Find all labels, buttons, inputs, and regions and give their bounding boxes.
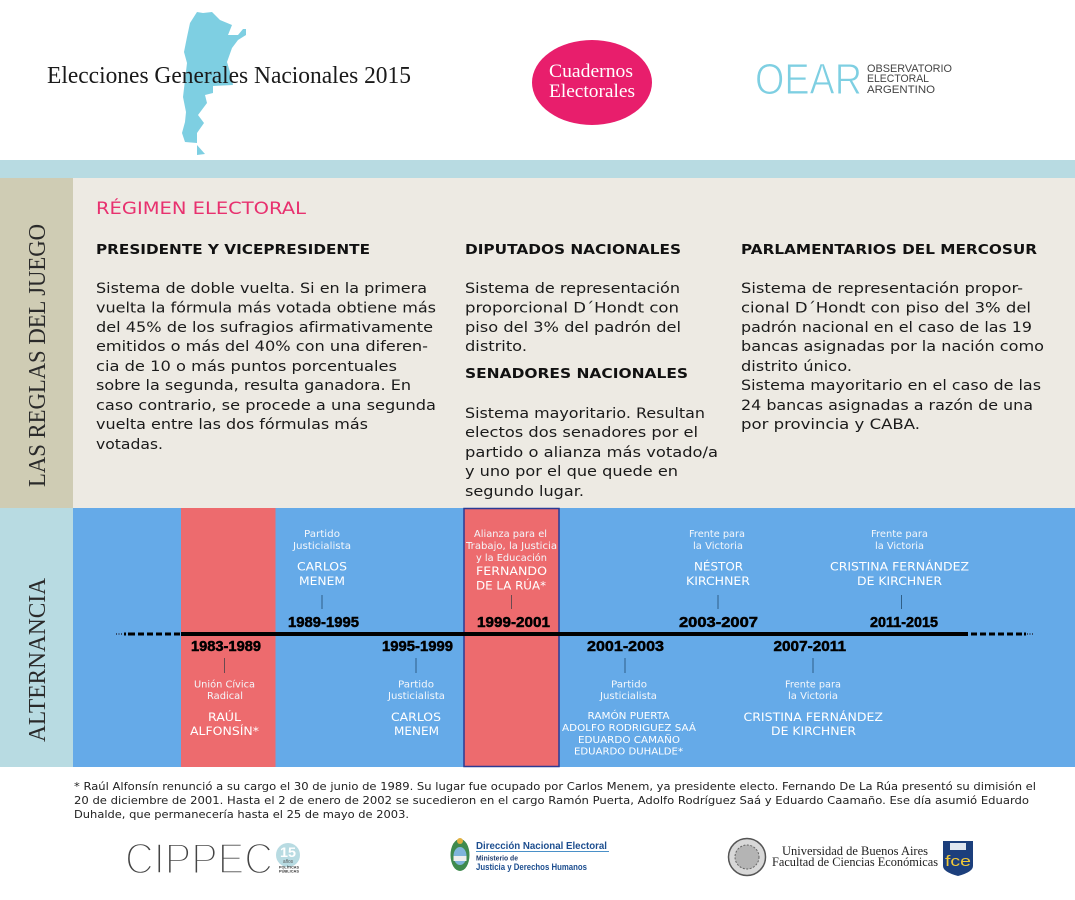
period: interinos 2001-2003: EDUARDO DUHALDE* bbox=[574, 746, 683, 758]
period: Alfonsín 1983-1989: RAÚL bbox=[208, 709, 242, 724]
column: parlamentarios del mercosur: Sistema de representación propor- bbox=[741, 281, 1023, 297]
period: De la Rúa 1999-2001: Alianza para el bbox=[474, 529, 547, 540]
column: parlamentarios del mercosur: padrón nacional en el caso de las 19 bbox=[741, 320, 1032, 336]
footnote: 20 de diciembre de 2001. Hasta el 2 de enero de 2002 se sucedieron en el cargo Ramón Puerta, Adolfo Rodríguez Saá y Eduardo Caamaño. Ese día asumió Eduardo bbox=[74, 795, 1029, 807]
logo: Universidad de Buenos Aires: fce bbox=[945, 853, 971, 870]
period: Menem 1995-1999 bbox=[382, 639, 453, 738]
period: Fernández de Kirchner 2007-2011: DE KIRCHNER bbox=[771, 724, 856, 738]
header bbox=[47, 12, 952, 155]
period: Kirchner 2003-2007: la Victoria bbox=[693, 541, 743, 552]
period: Menem 1989-1995: Partido bbox=[304, 529, 340, 540]
logo: CIPPEC: CIPPEC bbox=[125, 834, 273, 884]
column: diputados nacionales: DIPUTADOS NACIONALES bbox=[465, 242, 681, 258]
badge: Cuadernos Electorales: Cuadernos bbox=[549, 62, 633, 82]
period: De la Rúa 1999-2001: DE LA RÚA* bbox=[476, 578, 546, 592]
period: Menem 1989-1995 bbox=[288, 529, 359, 631]
logo: OEAR: OBSERVATORIO bbox=[867, 63, 952, 75]
column: senadores nacionales bbox=[465, 366, 718, 500]
period: Fernández de Kirchner 2011-2015: la Victoria bbox=[875, 541, 924, 552]
column: parlamentarios del mercosur: bancas asignadas por la nación como bbox=[741, 339, 1044, 355]
logo: Universidad de Buenos Aires: Facultad de Ciencias Económicas bbox=[772, 854, 938, 869]
column: presidente y vicepresidente: PRESIDENTE Y VICEPRESIDENTE bbox=[96, 242, 370, 258]
section label: las reglas del juego: LAS REGLAS DEL JUEGO bbox=[24, 224, 51, 487]
period: interinos 2001-2003 bbox=[562, 639, 696, 758]
icon: map of Argentina bbox=[182, 12, 246, 155]
column: parlamentarios del mercosur: distrito único. bbox=[741, 359, 852, 375]
column: diputados nacionales: piso del 3% del padrón del bbox=[465, 320, 681, 336]
column: parlamentarios del mercosur: PARLAMENTARIOS DEL MERCOSUR bbox=[741, 242, 1038, 258]
period: Fernández de Kirchner 2007-2011: la Victoria bbox=[788, 691, 838, 702]
logo: CIPPEC: años bbox=[283, 859, 293, 865]
period: De la Rúa 1999-2001: FERNANDO bbox=[476, 564, 547, 578]
period: Menem 1995-1999: Justicialista bbox=[387, 691, 445, 702]
column: presidente y vicepresidente: Sistema de doble vuelta. Si en la primera bbox=[96, 281, 427, 297]
period: Fernández de Kirchner 2007-2011: CRISTINA FERNÁNDEZ bbox=[744, 709, 883, 724]
period: Kirchner 2003-2007: 2003-2007 bbox=[679, 615, 758, 631]
period: De la Rúa 1999-2001 bbox=[465, 529, 557, 631]
column: diputados nacionales: distrito. bbox=[465, 339, 527, 355]
period: Alfonsín 1983-1989: ALFONSÍN* bbox=[190, 723, 259, 738]
period: Menem 1995-1999: MENEM bbox=[394, 724, 439, 738]
column: diputados nacionales: proporcional D´Hondt con bbox=[465, 300, 679, 316]
column: parlamentarios del mercosur: cional D´Hondt con piso del 3% del bbox=[741, 300, 1031, 316]
column: senadores nacionales: y uno por el que quede en bbox=[465, 464, 678, 480]
column: presidente y vicepresidente: vuelta entre las dos fórmulas más bbox=[96, 417, 368, 433]
period: De la Rúa 1999-2001: Trabajo, la Justicia bbox=[465, 541, 557, 552]
logo: CIPPEC: PÚBLICAS bbox=[279, 868, 299, 874]
timeline bbox=[115, 632, 1034, 636]
column: parlamentarios del mercosur: Sistema mayoritario en el caso de las bbox=[741, 378, 1041, 394]
period: Menem 1995-1999: Partido bbox=[398, 680, 434, 690]
column: parlamentarios del mercosur: por provincia y CABA. bbox=[741, 417, 920, 433]
period: Kirchner 2003-2007: Frente para bbox=[689, 529, 745, 540]
logo: CIPPEC: POLÍTICAS bbox=[279, 864, 299, 870]
badge: Cuadernos Electorales: Electorales bbox=[549, 82, 635, 102]
logo: Dirección Nacional Electoral: Ministerio de bbox=[476, 854, 518, 862]
section label: alternancia: ALTERNANCIA bbox=[24, 578, 51, 742]
period: Fernández de Kirchner 2011-2015 bbox=[830, 529, 969, 631]
footnote bbox=[74, 781, 1036, 821]
column: senadores nacionales: partido o alianza más votado/a bbox=[465, 445, 718, 461]
period: Menem 1995-1999: CARLOS bbox=[391, 710, 441, 724]
period: Fernández de Kirchner 2007-2011 bbox=[744, 639, 883, 738]
column: parlamentarios del mercosur: 24 bancas asignadas a razón de una bbox=[741, 398, 1033, 414]
logo: OEAR bbox=[755, 55, 952, 104]
period: Kirchner 2003-2007: KIRCHNER bbox=[686, 574, 750, 588]
column: presidente y vicepresidente: votadas. bbox=[96, 437, 163, 453]
red column: 1983-1989 bbox=[181, 508, 276, 767]
panel: alternancia bbox=[0, 508, 1075, 767]
period: Alfonsín 1983-1989 bbox=[190, 639, 261, 738]
period: Fernández de Kirchner 2011-2015: 2011-2015 bbox=[870, 615, 938, 631]
logo: OEAR: ELECTORAL bbox=[867, 73, 929, 85]
period: Fernández de Kirchner 2007-2011: 2007-2011 bbox=[774, 639, 846, 655]
period: Menem 1989-1995: CARLOS bbox=[297, 560, 347, 574]
period: interinos 2001-2003: ADOLFO RODRIGUEZ SAÁ bbox=[562, 721, 696, 734]
column: senadores nacionales: segundo lugar. bbox=[465, 484, 584, 500]
title: Elecciones Generales Nacionales 2015 bbox=[47, 63, 411, 89]
period: Kirchner 2003-2007: NÉSTOR bbox=[694, 558, 743, 574]
column: presidente y vicepresidente: caso contrario, se procede a una segunda bbox=[96, 398, 436, 414]
badge: Cuadernos Electorales bbox=[532, 40, 652, 125]
period: De la Rúa 1999-2001: y la Educación bbox=[476, 552, 547, 564]
red column: 1999-2001 bbox=[464, 508, 559, 766]
period: Kirchner 2003-2007 bbox=[679, 529, 758, 631]
footnote: * Raúl Alfonsín renunció a su cargo el 30 de junio de 1989. Su lugar fue ocupado por Carlos Menem, ya presidente electo. Fernando De La Rúa presentó su dimisión el bbox=[74, 781, 1036, 793]
period: Alfonsín 1983-1989: Radical bbox=[207, 691, 243, 702]
column: senadores nacionales: electos dos senadores por el bbox=[465, 425, 698, 441]
period: Menem 1989-1995: Justicialista bbox=[292, 541, 351, 552]
column: diputados nacionales bbox=[465, 242, 681, 355]
period: interinos 2001-2003: EDUARDO CAMAÑO bbox=[578, 733, 680, 746]
footnote: Duhalde, que permanecería hasta el 25 de mayo de 2003. bbox=[74, 809, 409, 821]
logo: OEAR: OEAR bbox=[755, 55, 862, 104]
logo: Universidad de Buenos Aires bbox=[728, 838, 973, 876]
column: presidente y vicepresidente bbox=[96, 242, 436, 453]
period: interinos 2001-2003: RAMÓN PUERTA bbox=[588, 709, 670, 722]
period: Alfonsín 1983-1989: 1983-1989 bbox=[191, 639, 261, 655]
period: interinos 2001-2003: 2001-2003 bbox=[587, 639, 664, 655]
logo: Dirección Nacional Electoral bbox=[450, 838, 609, 873]
panel: las reglas del juego bbox=[0, 178, 1075, 508]
period: Menem 1995-1999: 1995-1999 bbox=[382, 639, 453, 655]
period: Menem 1989-1995: 1989-1995 bbox=[288, 615, 359, 631]
period: Fernández de Kirchner 2011-2015: Frente para bbox=[871, 529, 928, 540]
period: Menem 1989-1995: MENEM bbox=[299, 574, 345, 588]
period: Fernández de Kirchner 2011-2015: DE KIRCHNER bbox=[857, 574, 942, 588]
column: senadores nacionales: SENADORES NACIONALES bbox=[465, 366, 688, 382]
column: presidente y vicepresidente: sobre la segunda, resulta ganadora. En bbox=[96, 378, 411, 394]
heading: régimen electoral: RÉGIMEN ELECTORAL bbox=[96, 199, 307, 218]
column: senadores nacionales: Sistema mayoritario. Resultan bbox=[465, 406, 705, 422]
column: presidente y vicepresidente: cia de 10 o más puntos porcentuales bbox=[96, 359, 397, 375]
logo: OEAR: ARGENTINO bbox=[867, 84, 935, 96]
period: Alfonsín 1983-1989: Unión Cívica bbox=[194, 678, 255, 690]
period: interinos 2001-2003: Justicialista bbox=[599, 691, 657, 702]
column: presidente y vicepresidente: emitidos o más del 40% con una diferen- bbox=[96, 339, 428, 355]
column: diputados nacionales: Sistema de representación bbox=[465, 281, 680, 297]
period: Fernández de Kirchner 2011-2015: CRISTINA FERNÁNDEZ bbox=[830, 558, 969, 574]
decorative band bbox=[0, 160, 1075, 178]
column: presidente y vicepresidente: vuelta la fórmula más votada obtiene más bbox=[96, 300, 436, 316]
column: presidente y vicepresidente: del 45% de los sufragios afirmativamente bbox=[96, 320, 433, 336]
period: De la Rúa 1999-2001: 1999-2001 bbox=[477, 615, 550, 631]
logo: Universidad de Buenos Aires: Universidad de Buenos Aires bbox=[782, 843, 928, 858]
logo: Dirección Nacional Electoral: Justicia y Derechos Humanos bbox=[476, 862, 587, 873]
period: interinos 2001-2003: Partido bbox=[611, 680, 647, 690]
period: Fernández de Kirchner 2007-2011: Frente para bbox=[785, 680, 841, 690]
logo: CIPPEC: 15 bbox=[280, 844, 296, 860]
logo: Dirección Nacional Electoral: Dirección Nacional Electoral bbox=[476, 840, 607, 852]
column: parlamentarios del mercosur bbox=[741, 242, 1044, 433]
